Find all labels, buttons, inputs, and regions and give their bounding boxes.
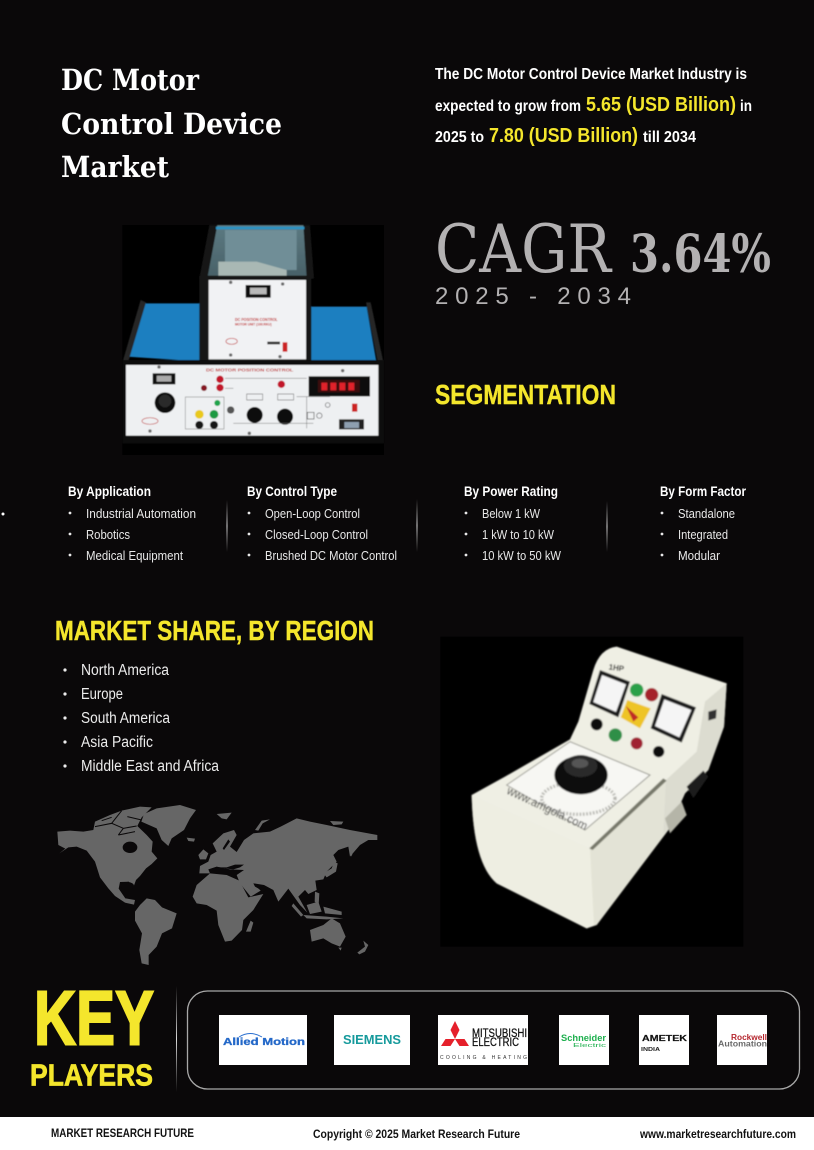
segment: by control type [247, 483, 397, 563]
segment: by application: Medical Equipment [86, 548, 183, 563]
footer: MARKET RESEARCH FUTURE [51, 1126, 194, 1140]
logo: Rockwell Automation [717, 1015, 767, 1065]
logo: Mitsubishi Electric [438, 1015, 528, 1065]
footer [0, 1117, 814, 1150]
market growth summary: 2025 to [435, 129, 484, 146]
segment: by control type: Closed-Loop Control [265, 527, 368, 542]
indicator lamps and selector switch [630, 683, 643, 697]
key players panel [188, 991, 800, 1089]
market growth summary: 5.65 (USD Billion) [586, 94, 736, 116]
logo: Allied Motion: Allied Motion [223, 1037, 305, 1048]
region list [63, 662, 219, 775]
logo: Rockwell Automation: Rockwell [731, 1033, 767, 1042]
segment: by control type: Open-Loop Control [265, 506, 360, 521]
logo: Schneider Electric: Schneider [561, 1033, 607, 1043]
segment: by application: By Application [68, 483, 151, 499]
segment: by control type: Brushed DC Motor Control [265, 548, 397, 563]
CAGR figure: CAGR [435, 211, 613, 288]
world map [57, 805, 377, 965]
segment: by form factor [660, 483, 746, 563]
product photo: DC motor position control unit: MOTOR UNIT (100:RKU) [235, 321, 272, 326]
section heading: market share by region: MARKET SHARE, BY REGION [55, 615, 374, 646]
logo: Mitsubishi Electric: ELECTRIC [472, 1037, 519, 1049]
logo: Schneider Electric: Electric [573, 1043, 606, 1049]
title: Control Device [61, 107, 282, 141]
CAGR figure [435, 211, 771, 310]
market growth summary: expected to grow from [435, 98, 581, 115]
region list: Europe [81, 686, 123, 703]
segment: by control type: By Control Type [247, 483, 337, 499]
logo: Rockwell Automation: Automation [718, 1040, 767, 1048]
main control panel [123, 360, 384, 443]
stray bullet [2, 512, 4, 516]
CAGR figure: 2025 - 2034 [435, 283, 631, 310]
logo: Ametek India: INDIA [641, 1047, 660, 1053]
market growth summary [435, 66, 752, 147]
logo: Allied Motion [219, 1015, 307, 1065]
region list: North America [81, 662, 169, 679]
product photo: motor speed control box [440, 637, 743, 947]
device silhouette [472, 647, 727, 928]
region list: Middle East and Africa [81, 758, 219, 775]
right meter [651, 694, 696, 743]
logo: Ametek India: AMETEK [642, 1033, 688, 1043]
dial plate [507, 742, 650, 830]
segment: by application: Robotics [86, 527, 130, 542]
product photo: DC motor position control unit: DC MOTOR POSITION CONTROL [206, 368, 294, 373]
blue side panels [127, 303, 377, 363]
title: DC Motor [61, 63, 200, 97]
region list: South America [81, 710, 170, 727]
logo: Schneider Electric [559, 1015, 609, 1065]
top glass case [200, 225, 313, 278]
side switch and socket [687, 771, 708, 798]
CAGR figure: 3.64% [630, 224, 771, 285]
product photo: DC motor position control unit [122, 225, 384, 455]
logo: Mitsubishi Electric: MITSUBISHI [472, 1028, 527, 1040]
key players heading: KEY [34, 976, 154, 1062]
section heading: segmentation: SEGMENTATION [435, 379, 616, 410]
title: Market [61, 150, 170, 184]
segment: by form factor: Modular [678, 548, 721, 563]
segment: by power rating [464, 483, 562, 563]
upper white module [199, 276, 311, 365]
product photo: motor speed control box: www.amgola.com [504, 783, 590, 833]
logo: Mitsubishi Electric: COOLING & HEATING [440, 1055, 527, 1061]
product photo: motor speed control box: 1HP [608, 662, 625, 674]
key players heading: PLAYERS [30, 1058, 153, 1092]
product photo: DC motor position control unit: DC POSITION CONTROL [235, 317, 278, 322]
segment: by application [68, 483, 196, 563]
footer: Copyright © 2025 Market Research Future [313, 1127, 520, 1141]
market growth summary: in [740, 98, 752, 115]
segment: by form factor: By Form Factor [660, 483, 746, 499]
segment: by form factor: Standalone [678, 506, 735, 521]
logo: Ametek India [639, 1015, 689, 1065]
segment: by power rating: By Power Rating [464, 483, 558, 499]
front face [472, 795, 595, 928]
title [61, 63, 282, 184]
segment: by power rating: 10 kW to 50 kW [482, 548, 562, 563]
segment: by power rating: 1 kW to 10 kW [482, 527, 555, 542]
logo: Siemens [334, 1015, 410, 1065]
market growth summary: till 2034 [643, 129, 696, 146]
logo: Siemens: SIEMENS [343, 1033, 401, 1047]
market growth summary: 7.80 (USD Billion) [489, 125, 638, 147]
segment: by application: Industrial Automation [86, 506, 196, 521]
right side shading [663, 683, 727, 833]
market growth summary: The DC Motor Control Device Market Industry is [435, 66, 747, 83]
left meter [589, 670, 630, 717]
segment: by form factor: Integrated [678, 527, 728, 542]
region list: Asia Pacific [81, 734, 153, 751]
key players heading [30, 976, 154, 1092]
segment: by power rating: Below 1 kW [482, 506, 541, 521]
